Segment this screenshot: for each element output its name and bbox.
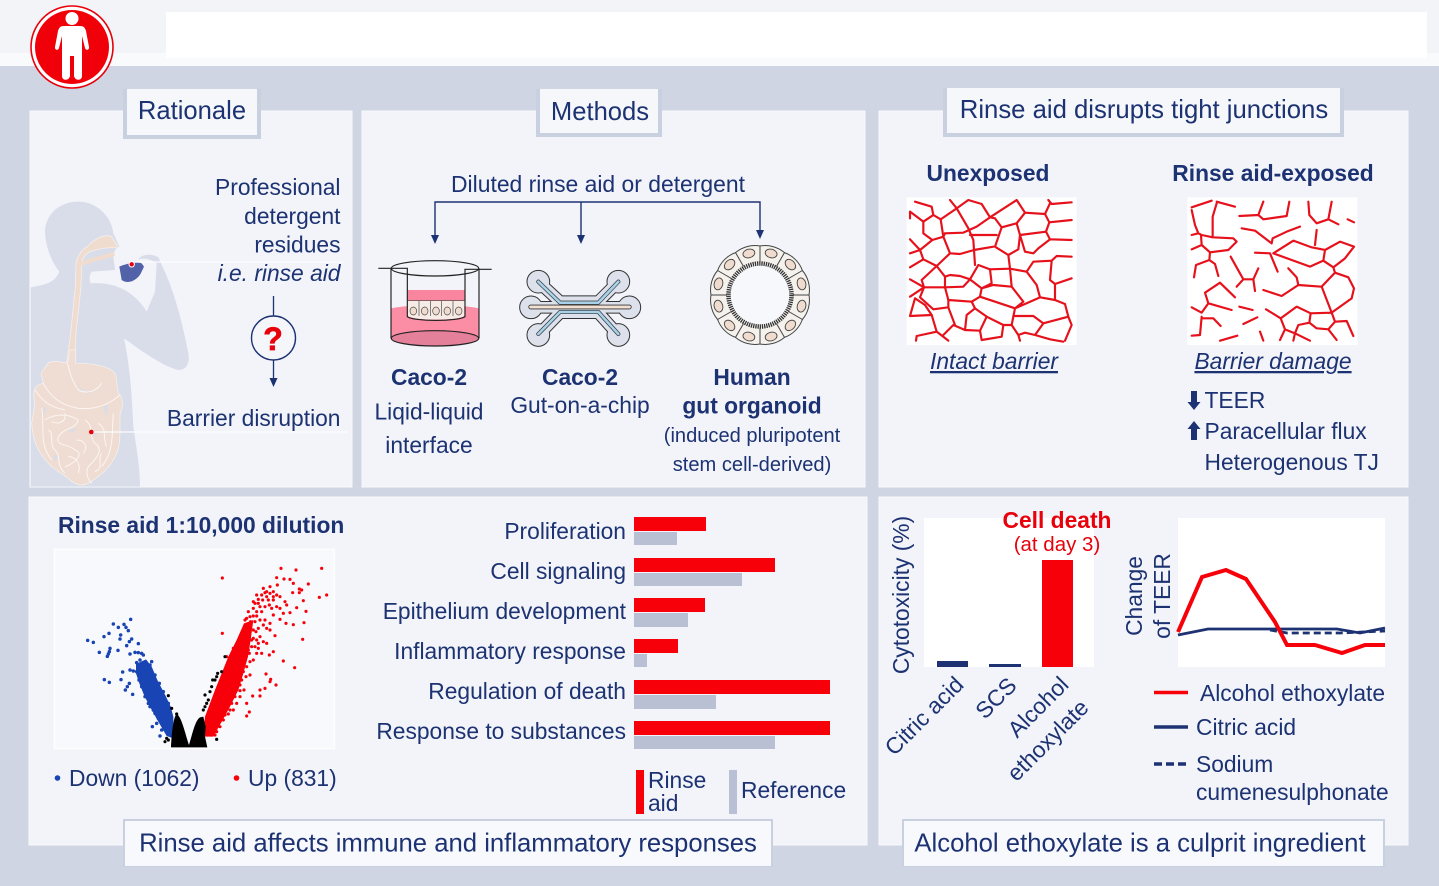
micrograph: damaged tight junction network xyxy=(1187,197,1357,345)
bar chart: cytotoxicity: Alcohol xyxy=(1002,671,1074,742)
legend: down: Down (1062) xyxy=(69,765,200,791)
legend: alcohol ethoxylate: Alcohol ethoxylate xyxy=(1200,680,1385,706)
panel: culprit ingredient xyxy=(879,497,1408,845)
text: barrier disruption: Barrier disruption xyxy=(167,405,340,431)
diagram: human gut organoid xyxy=(711,246,809,344)
line chart: change of TEER: Change xyxy=(1121,556,1147,636)
legend: sodium cumenesulphonate: Sodium xyxy=(1196,751,1273,777)
bar chart: pathway enrichment: Regulation of death xyxy=(428,678,626,704)
legend: up: Up (831) xyxy=(248,765,337,791)
heading: rationale xyxy=(123,89,261,139)
legend: rinse aid xyxy=(636,767,706,816)
heading: rinse aid dilution: Rinse aid 1:10,000 dilution xyxy=(58,512,344,538)
diagram: gut-on-a-chip xyxy=(520,270,641,346)
text: Caco-2 liquid-liquid interface: interface xyxy=(385,432,473,458)
text: heterogenous TJ: Heterogenous TJ xyxy=(1204,449,1379,475)
text: professional detergent residues: i.e. rinse aid xyxy=(218,260,342,286)
text: professional detergent residues: residues xyxy=(254,232,340,258)
bar chart: pathway enrichment: Inflammatory response xyxy=(394,638,626,664)
bar chart: cytotoxicity: ethoxylate xyxy=(1002,694,1094,786)
legend: citric acid: Citric acid xyxy=(1196,714,1296,740)
bar chart: pathway enrichment: Proliferation xyxy=(504,518,626,544)
text: Caco-2 liquid-liquid interface: Caco-2 xyxy=(391,364,467,390)
heading: rinse aid affects immune and inflammatory responses: Rinse aid affects immune and inflammatory responses xyxy=(139,830,757,858)
bar chart: pathway enrichment: Cell signaling xyxy=(490,558,626,584)
icon: person in red circle xyxy=(31,6,113,88)
heading: rationale: Rationale xyxy=(138,97,246,125)
heading: rinse aid affects immune and inflammatory responses xyxy=(123,819,773,867)
leader line: cup to text xyxy=(131,261,343,263)
bar chart: pathway enrichment: Epithelium development xyxy=(383,598,627,624)
heading: methods xyxy=(536,89,662,137)
legend: sodium cumenesulphonate xyxy=(1154,751,1389,805)
leader line: gut to text xyxy=(91,431,347,433)
arrow with question mark: ? xyxy=(263,321,283,357)
heading: alcohol ethoxylate is a culprit ingredient xyxy=(902,819,1385,867)
heading: rinse aid disrupts tight junctions xyxy=(943,88,1344,137)
diagram: liquid-liquid interface insert xyxy=(378,261,492,346)
panel: rinse aid disrupts tight junctions xyxy=(879,111,1408,487)
icon: up arrow xyxy=(1188,421,1200,440)
marker: gut dot xyxy=(89,430,94,434)
line chart: change of TEER: of TEER xyxy=(1149,553,1175,639)
bar chart: cytotoxicity: Citric acid xyxy=(879,671,969,760)
illustration: person drinking with digestive tract xyxy=(31,202,189,487)
panel: methods xyxy=(362,111,865,487)
text: TEER: TEER xyxy=(1204,387,1265,413)
arrows: branching to models xyxy=(431,202,764,244)
heading: unexposed: Unexposed xyxy=(927,160,1049,186)
bar chart: cytotoxicity: (at day 3) xyxy=(1014,533,1100,556)
heading: rinse aid disrupts tight junctions: Rinse aid disrupts tight junctions xyxy=(960,96,1328,124)
bar chart: pathway enrichment xyxy=(376,517,830,749)
legend: rinse aid: aid xyxy=(648,790,678,816)
line chart: change of TEER xyxy=(1121,518,1385,667)
text: diluted rinse aid or detergent: Diluted rinse aid or detergent xyxy=(451,171,746,197)
bar chart: cytotoxicity xyxy=(879,507,1111,786)
volcano plot xyxy=(54,549,334,749)
legend: rinse aid: Rinse xyxy=(648,767,706,793)
bar chart: cytotoxicity: Cytotoxicity (%) xyxy=(888,516,914,674)
text: paracellular flux: Paracellular flux xyxy=(1204,418,1367,444)
bar chart: cytotoxicity: SCS xyxy=(970,672,1022,724)
text: professional detergent residues: Professional xyxy=(215,174,340,200)
legend: sodium cumenesulphonate: cumenesulphonate xyxy=(1196,779,1389,805)
text: barrier damage: Barrier damage xyxy=(1194,348,1352,374)
text: intact barrier: Intact barrier xyxy=(930,348,1059,374)
text: Caco-2 gut-on-a-chip: Gut-on-a-chip xyxy=(510,392,650,418)
micrograph: intact tight junction network xyxy=(907,197,1077,345)
arrow with question mark xyxy=(252,296,296,387)
panel: transcriptomics xyxy=(29,497,867,845)
heading: alcohol ethoxylate is a culprit ingredient: Alcohol ethoxylate is a culprit ingredient xyxy=(914,830,1366,858)
legend: reference: Reference xyxy=(741,777,846,803)
text: Caco-2 liquid-liquid interface: Liqid-liquid xyxy=(374,398,484,424)
marker: cup dot xyxy=(129,262,134,267)
text: human gut organoid: gut organoid xyxy=(682,392,822,418)
text: human gut organoid: Human xyxy=(713,364,791,390)
bar chart: cytotoxicity: Cell death xyxy=(1003,507,1111,533)
legend: reference xyxy=(729,770,846,814)
icon: down arrow xyxy=(1188,391,1200,410)
text: professional detergent residues: detergent xyxy=(244,203,341,229)
panel: rationale xyxy=(30,111,352,487)
text: human gut organoid: stem cell-derived) xyxy=(673,454,831,476)
title banner xyxy=(166,12,1427,58)
text: Caco-2 gut-on-a-chip: Caco-2 xyxy=(542,364,618,390)
text: human gut organoid: (induced pluripotent xyxy=(664,425,841,447)
bar chart: pathway enrichment: Response to substances xyxy=(376,718,626,744)
heading: rinse aid-exposed: Rinse aid-exposed xyxy=(1172,160,1374,186)
heading: methods: Methods xyxy=(551,98,649,126)
